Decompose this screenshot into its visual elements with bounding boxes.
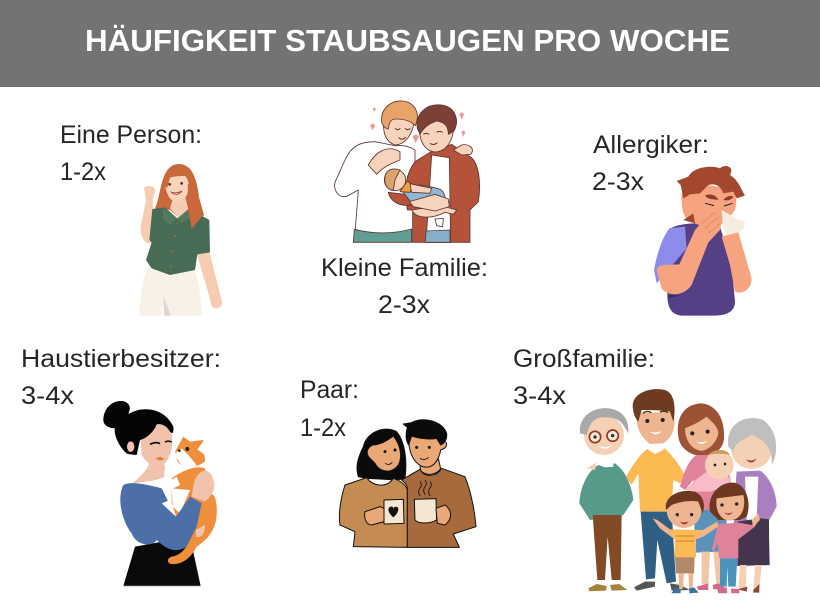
title: HÄUFIGKEIT STAUBSAUGEN PRO WOCHE bbox=[85, 23, 730, 58]
icon: extended family of six bbox=[579, 389, 777, 593]
boy bbox=[653, 491, 718, 593]
girl bbox=[709, 483, 760, 593]
label: Großfamilie: Großfamilie: bbox=[513, 345, 655, 373]
label: Paar: Paar: bbox=[300, 376, 359, 404]
icon: two fathers with baby bbox=[335, 101, 480, 242]
grandfather bbox=[579, 408, 633, 591]
label: Haustierbesitzer: 3-4x bbox=[21, 382, 75, 410]
label: Eine Person: 1-2x bbox=[60, 158, 106, 186]
title banner bbox=[0, 0, 820, 87]
label: Eine Person bbox=[60, 121, 202, 186]
label: Kleine Familie: 2-3x bbox=[378, 291, 431, 319]
icon: couple with coffee mugs bbox=[339, 420, 476, 547]
label: Paar bbox=[300, 376, 359, 442]
label: Haustierbesitzer: Haustierbesitzer: bbox=[21, 345, 221, 373]
grandmother bbox=[728, 418, 777, 593]
label: Haustierbesitzer bbox=[21, 345, 221, 410]
icon: woman in green blouse bbox=[139, 164, 222, 316]
label: Kleine Familie bbox=[321, 254, 488, 319]
icon: woman holding orange cat bbox=[103, 401, 217, 586]
label: Allergiker bbox=[592, 131, 709, 196]
label: Großfamilie: 3-4x bbox=[513, 382, 567, 410]
father bbox=[626, 389, 690, 591]
label: Großfamilie bbox=[513, 345, 655, 410]
label: Eine Person: Eine Person: bbox=[60, 121, 202, 149]
label: Allergiker: Allergiker: bbox=[593, 131, 709, 159]
label: Kleine Familie: Kleine Familie: bbox=[321, 254, 488, 282]
label: Paar: 1-2x bbox=[300, 414, 346, 442]
label: Allergiker: 2-3x bbox=[592, 168, 645, 196]
mother with baby bbox=[678, 403, 734, 590]
icon: sneezing man with tissue bbox=[654, 166, 752, 316]
